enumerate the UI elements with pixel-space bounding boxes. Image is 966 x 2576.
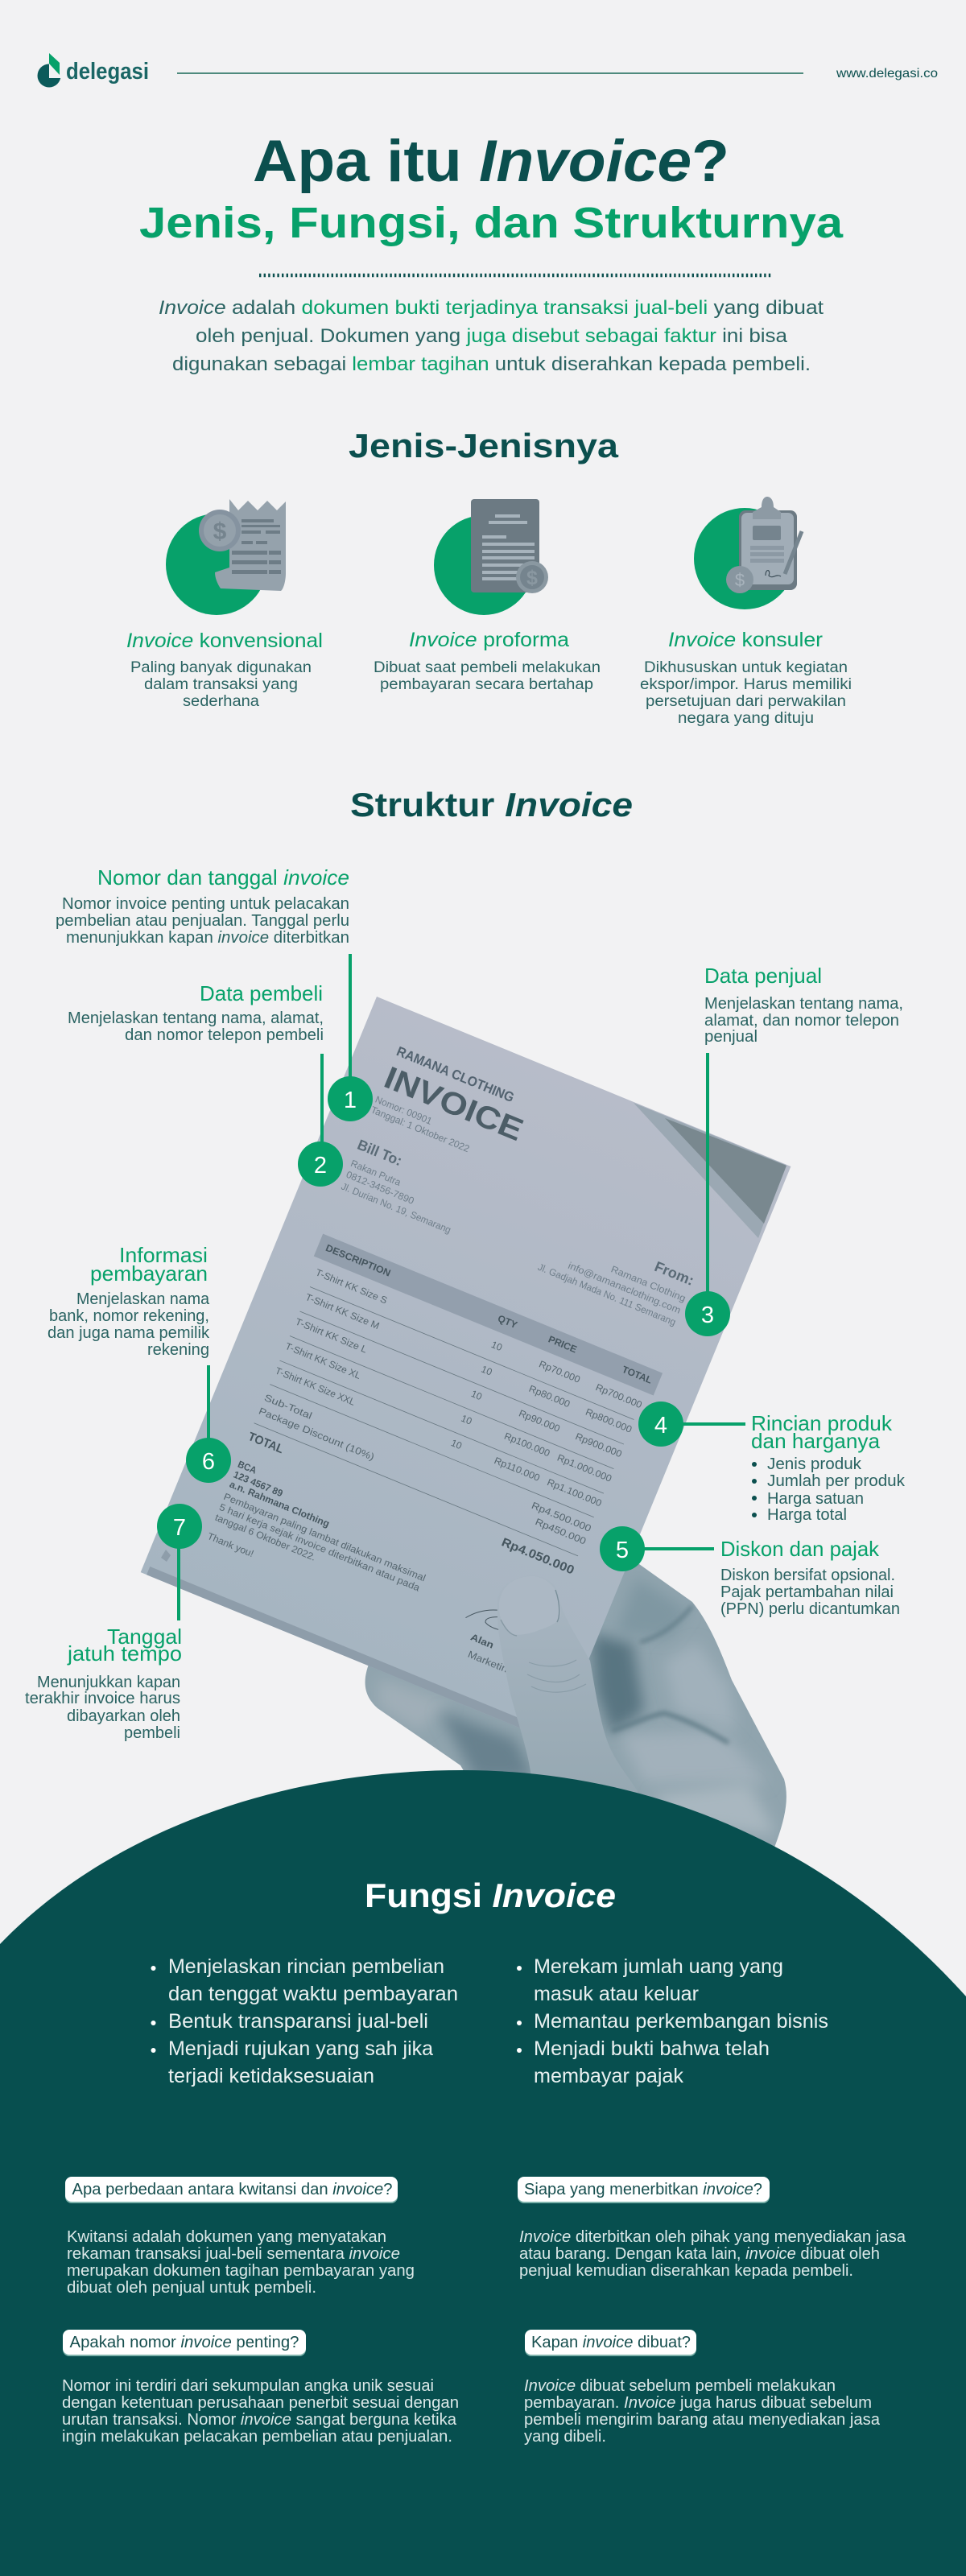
- title: Apa itu Invoice?: [253, 129, 729, 194]
- callout 1: nomor dan tanggal invoice: 1: [344, 1088, 357, 1113]
- invoice table: T-Shirt KK Size L: [294, 1316, 369, 1356]
- description: ekspor/impor. Harus memiliki: [640, 675, 852, 693]
- callout 7: tanggal jatuh tempo: dibayarkan oleh: [67, 1707, 180, 1725]
- panel: invoice proforma: [374, 499, 601, 693]
- list: fungsi kanan: Menjadi bukti bahwa telah: [534, 2037, 770, 2060]
- heading: Jenis-Jenisnya: Jenis-Jenisnya: [349, 427, 619, 464]
- invoice table: 10: [480, 1364, 494, 1378]
- bill to: Bill To:: [355, 1137, 404, 1169]
- faq 2: [518, 2177, 906, 2280]
- invoice table: Rp70.000: [538, 1358, 582, 1385]
- callout 1: nomor dan tanggal invoice: [56, 865, 373, 1121]
- callout 1: nomor dan tanggal invoice: pembelian atau penjualan. Tanggal perlu: [56, 912, 349, 930]
- faq 1: dibuat oleh penjual untuk pembeli.: [67, 2279, 316, 2297]
- invoice header text: [369, 1043, 535, 1170]
- invoice table: QTY: [496, 1313, 519, 1331]
- faq 3: urutan transaksi. Nomor invoice sangat berguna ketika: [62, 2411, 457, 2429]
- callout 5: diskon dan pajak: Diskon bersifat opsional.: [720, 1567, 895, 1584]
- callout 2: data pembeli: 2: [314, 1153, 327, 1179]
- panel: invoice konvensional: [126, 499, 323, 710]
- subtitle: Jenis, Fungsi, dan Strukturnya: [139, 199, 844, 247]
- invoice table: T-Shirt KK Size M: [303, 1291, 381, 1331]
- list: fungsi kanan: Merekam jumlah uang yang: [534, 1955, 783, 1978]
- faq 3: ingin melakukan pelacakan pembelian atau penjualan.: [62, 2428, 452, 2446]
- list: fungsi kiri: [151, 1955, 458, 2087]
- invoice table: Rp900.000: [574, 1430, 624, 1459]
- faq 4: yang dibeli.: [524, 2428, 606, 2446]
- icon: document: $: [526, 567, 538, 589]
- callout 7: tanggal jatuh tempo: [25, 1504, 202, 1742]
- invoice table: 10: [469, 1388, 484, 1402]
- callout 6: informasi pembayaran: bank, nomor rekening,: [49, 1307, 209, 1325]
- faq 4: Kapan invoice dibuat?: [531, 2334, 691, 2351]
- callout 6: informasi pembayaran: dan juga nama pemilik: [47, 1324, 210, 1342]
- corner decoration: [161, 1103, 786, 1562]
- faq 1: Kwitansi adalah dokumen yang menyatakan: [67, 2228, 386, 2246]
- callout 3: data penjual: [685, 964, 903, 1336]
- signature: Alan: [469, 1631, 496, 1651]
- heading: Struktur Invoice: Struktur Invoice: [350, 786, 633, 824]
- list: fungsi kiri: Menjelaskan rincian pembelian: [168, 1955, 444, 1978]
- invoice table: TOTAL: [246, 1430, 286, 1456]
- label: Invoice konvensional: [126, 630, 323, 652]
- callout 7: tanggal jatuh tempo: Tanggal: [107, 1624, 182, 1649]
- callout 4: rincian produk dan harganya: Rincian produk: [751, 1411, 893, 1435]
- invoice header text: INVOICE: [379, 1060, 528, 1148]
- intro paragraph: Invoice adalah dokumen bukti terjadinya transaksi jual-beli yang dibuat: [159, 297, 824, 319]
- from: Jl. Gadjah Mada No. 111 Semarang: [536, 1261, 678, 1328]
- invoice table: T-Shirt KK Size XL: [283, 1340, 363, 1381]
- callout 6: informasi pembayaran: pembayaran: [90, 1261, 208, 1286]
- callout 3: data penjual: alamat, dan nomor telepon: [704, 1012, 899, 1030]
- callout 3: data penjual: Menjelaskan tentang nama,: [704, 995, 903, 1013]
- callout 5: diskon dan pajak: 5: [616, 1538, 629, 1563]
- header bar: [37, 53, 938, 87]
- faq 2: penjual kemudian diserahkan kepada pembeli.: [519, 2262, 853, 2280]
- callout 4: rincian produk dan harganya: Jenis produk: [767, 1455, 862, 1473]
- from: From:: [652, 1258, 696, 1289]
- payment information: Thank you!: [206, 1530, 255, 1559]
- invoice table: Rp450.000: [534, 1516, 588, 1547]
- invoice table: Rp1.000.000: [555, 1452, 613, 1484]
- faq 4: Invoice dibuat sebelum pembeli melakukan: [524, 2377, 836, 2395]
- from: info@ramanaclothing.com: [567, 1260, 683, 1316]
- invoice table: [238, 1234, 663, 1580]
- payment information: BCA: [236, 1459, 258, 1476]
- intro paragraph: digunakan sebagai lembar tagihan untuk diserahkan kepada pembeli.: [172, 353, 811, 375]
- list: fungsi kanan: Memantau perkembangan bisnis: [534, 2010, 828, 2033]
- callout 5: diskon dan pajak: [600, 1526, 900, 1618]
- list: fungsi kiri: Bentuk transparansi jual-beli: [168, 2010, 428, 2033]
- icon: receipt: [166, 499, 286, 615]
- callout 2: data pembeli: Data pembeli: [200, 981, 323, 1005]
- invoice table: Rp90.000: [517, 1407, 562, 1435]
- description: dalam transaksi yang: [144, 675, 298, 693]
- invoice table: Rp800.000: [584, 1406, 634, 1435]
- payment information: [206, 1458, 441, 1623]
- payment information: Pembayaran paling lambat dilakukan maksimal: [222, 1491, 427, 1583]
- invoice table: PRICE: [547, 1333, 579, 1355]
- description: [640, 658, 852, 727]
- logo: delegasi: [37, 53, 149, 87]
- description: Dikhususkan untuk kegiatan: [644, 658, 848, 676]
- callout 4: rincian produk dan harganya: Harga total: [767, 1506, 847, 1524]
- invoice table: Rp700.000: [594, 1381, 644, 1410]
- icon: document: [434, 499, 548, 615]
- callout 6: informasi pembayaran: Informasi: [119, 1243, 208, 1267]
- invoice paper: [141, 997, 791, 1742]
- callout 3: data penjual: Data penjual: [704, 964, 822, 988]
- callout 1: nomor dan tanggal invoice: Nomor invoice penting untuk pelacakan: [62, 895, 349, 913]
- callout 5: diskon dan pajak: Diskon dan pajak: [720, 1537, 880, 1561]
- faq 3: Apakah nomor invoice penting?: [69, 2334, 299, 2351]
- invoice table: DESCRIPTION: [324, 1242, 392, 1279]
- faq 2: Invoice diterbitkan oleh pihak yang menyediakan jasa: [519, 2228, 906, 2246]
- bill to: Jl. Durian No. 19, Semarang: [340, 1181, 452, 1236]
- faq 2: Siapa yang menerbitkan invoice?: [524, 2181, 762, 2198]
- callout 5: diskon dan pajak: (PPN) perlu dicantumkan: [720, 1600, 900, 1618]
- callout 7: tanggal jatuh tempo: jatuh tempo: [67, 1641, 182, 1666]
- faq 1: Apa perbedaan antara kwitansi dan invoice?: [72, 2181, 393, 2198]
- signature: [452, 1597, 534, 1677]
- invoice table: TOTAL: [621, 1364, 654, 1386]
- faq 3: [62, 2330, 459, 2446]
- list: fungsi kanan: membayar pajak: [534, 2065, 683, 2087]
- intro paragraph: [159, 297, 824, 375]
- callout 6: informasi pembayaran: rekening: [147, 1341, 209, 1359]
- invoice table: Rp4.500.000: [530, 1500, 593, 1534]
- list: fungsi kiri: Menjadi rujukan yang sah jika: [168, 2037, 433, 2060]
- callout 7: tanggal jatuh tempo: terakhir invoice harus: [25, 1690, 180, 1707]
- payment information: 5 hari kerja sejak invoice diterbitkan atau pada: [217, 1501, 422, 1594]
- logo: delegasi: delegasi: [66, 59, 149, 85]
- heading: Fungsi Invoice: Fungsi Invoice: [365, 1876, 616, 1914]
- invoice table: 10: [460, 1413, 474, 1427]
- faq 1: [65, 2177, 415, 2297]
- invoice header text: Tanggal: 1 Oktober 2022: [369, 1104, 472, 1154]
- icon: clipboard: $: [735, 570, 745, 590]
- callout 6: informasi pembayaran: Menjelaskan nama: [76, 1290, 210, 1308]
- invoice table: Rp100.000: [502, 1430, 552, 1459]
- faq 4: [524, 2330, 881, 2446]
- icon: clipboard: [694, 497, 802, 609]
- icon: receipt: $: [213, 518, 227, 545]
- thumb: [497, 1575, 640, 1795]
- payment information: a.n. Rahmana Clothing: [228, 1479, 331, 1530]
- invoice table: Sub-Total: [262, 1392, 314, 1422]
- panel: fungsi invoice dome: [0, 1770, 966, 2576]
- payment information: tanggal 6 Oktober 2022.: [213, 1512, 317, 1563]
- description: sederhana: [183, 692, 259, 710]
- faq 1: rekaman transaksi jual-beli sementara invoice: [67, 2245, 400, 2263]
- list: fungsi kiri: dan tenggat waktu pembayaran: [168, 1983, 458, 2005]
- payment information: 123 4567 89: [232, 1469, 285, 1499]
- invoice table: Rp80.000: [527, 1383, 572, 1410]
- invoice table: Rp4.050.000: [499, 1535, 576, 1578]
- invoice header text: RAMANA CLOTHING: [394, 1043, 516, 1105]
- faq 4: pembayaran. Invoice juga harus dibuat sebelum: [524, 2394, 872, 2412]
- invoice table: T-Shirt KK Size S: [314, 1266, 389, 1306]
- faq 3: Nomor ini terdiri dari sekumpulan angka unik sesuai: [62, 2377, 434, 2395]
- bill to: [339, 1137, 471, 1236]
- callout 6: informasi pembayaran: 6: [202, 1449, 215, 1475]
- illustration: hand holding invoice: [141, 997, 805, 1860]
- signature: Marketing: [466, 1649, 515, 1677]
- list: fungsi kanan: [517, 1955, 828, 2087]
- from: Ramana Clothing: [609, 1263, 687, 1304]
- callout 5: diskon dan pajak: Pajak pertambahan nilai: [720, 1583, 894, 1601]
- callout 3: data penjual: penjual: [704, 1028, 758, 1046]
- invoice table: Rp110.000: [493, 1455, 542, 1484]
- intro paragraph: oleh penjual. Dokumen yang juga disebut sebagai faktur ini bisa: [196, 325, 787, 347]
- callout 2: data pembeli: Menjelaskan tentang nama, alamat,: [68, 1009, 324, 1027]
- callout 2: data pembeli: dan nomor telepon pembeli: [125, 1026, 324, 1044]
- callout 1: nomor dan tanggal invoice: Nomor dan tanggal invoice: [97, 865, 349, 890]
- callout 4: rincian produk dan harganya: 4: [654, 1413, 667, 1439]
- description: persetujuan dari perwakilan: [646, 692, 846, 710]
- callout 7: tanggal jatuh tempo: Menunjukkan kapan: [37, 1674, 180, 1691]
- invoice header text: Nomor: 00901: [374, 1094, 434, 1127]
- faq 3: dengan ketentuan perusahaan penerbit sesuai dengan: [62, 2394, 459, 2412]
- hand back: [365, 1564, 786, 1847]
- callout 7: tanggal jatuh tempo: 7: [173, 1515, 186, 1541]
- callout 4: rincian produk dan harganya: Harga satuan: [767, 1490, 864, 1508]
- callout 4: rincian produk dan harganya: dan harganya: [751, 1429, 881, 1453]
- invoice table: Rp1.100.000: [546, 1476, 604, 1509]
- invoice table: 10: [449, 1437, 464, 1451]
- callout 7: tanggal jatuh tempo: pembeli: [124, 1724, 180, 1742]
- callout 1: nomor dan tanggal invoice: menunjukkan kapan invoice diterbitkan: [66, 929, 349, 947]
- callout 6: informasi pembayaran: [47, 1243, 231, 1483]
- label: Invoice konsuler: [668, 629, 823, 651]
- invoice table: 10: [489, 1339, 504, 1353]
- bill to: 0812-3456-7890: [345, 1169, 416, 1207]
- description: Paling banyak digunakan: [130, 658, 312, 676]
- from: [536, 1217, 696, 1328]
- callout 4: rincian produk dan harganya: [638, 1402, 906, 1524]
- description: [374, 658, 601, 693]
- description: [130, 658, 312, 710]
- faq 1: merupakan dokumen tagihan pembayaran yang: [67, 2262, 415, 2280]
- faq 4: pembeli mengirim barang atau menyediakan jasa: [524, 2411, 881, 2429]
- invoice table: T-Shirt KK Size XXL: [274, 1365, 357, 1408]
- callout 4: rincian produk dan harganya: Jumlah per produk: [767, 1472, 906, 1490]
- invoice table: Package Discount (10%): [257, 1406, 376, 1463]
- panel: invoice konsuler: [640, 497, 852, 727]
- description: negara yang dituju: [678, 709, 814, 727]
- bill to: Rakan Putra: [349, 1158, 402, 1188]
- list: fungsi kanan: masuk atau keluar: [534, 1983, 699, 2005]
- list: fungsi kiri: terjadi ketidaksesuaian: [168, 2065, 374, 2087]
- label: Invoice proforma: [409, 629, 569, 651]
- faq 2: atau barang. Dengan kata lain, invoice dibuat oleh: [519, 2245, 880, 2263]
- callout 2: data pembeli: [68, 981, 343, 1187]
- callout 3: data penjual: 3: [701, 1302, 714, 1328]
- description: pembayaran secara bertahap: [380, 675, 593, 693]
- description: Dibuat saat pembeli melakukan: [374, 658, 601, 676]
- website url: www.delegasi.co: [836, 67, 938, 80]
